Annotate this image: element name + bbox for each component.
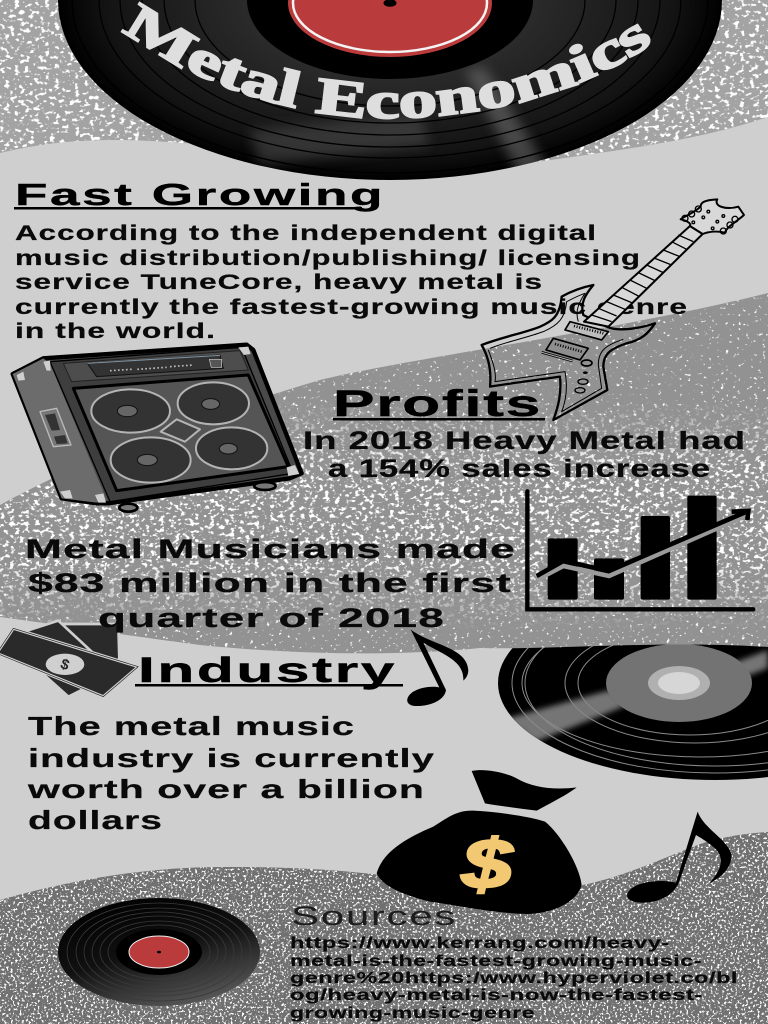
icon: banknotes	[0, 621, 138, 697]
text block: industry worth: dollars	[28, 805, 163, 835]
text block: source links: growing-music-genre	[290, 1005, 535, 1022]
text block: source links	[290, 935, 738, 1022]
vinyl record: sources	[58, 898, 260, 1006]
record label	[129, 936, 189, 968]
text block: fast growing: service TuneCore, heavy metal is	[15, 271, 543, 294]
text block: musicians earnings: Metal Musicians made	[25, 534, 516, 564]
vinyl record: right	[498, 644, 768, 780]
text block: musicians earnings: quarter of 2018	[98, 603, 445, 633]
text block: industry worth	[26, 711, 435, 835]
dollar sign: $	[461, 826, 513, 904]
text block: sales increase: a 154% sales increase	[328, 455, 711, 483]
amp wheels	[119, 482, 276, 512]
texture band: top	[0, 0, 768, 162]
text block: industry worth: worth over a billion	[26, 774, 425, 804]
trend arrow	[537, 511, 748, 580]
text block: industry worth: The metal music	[28, 711, 355, 741]
heading: Profits: Profits	[333, 383, 542, 424]
amp speakers	[91, 382, 267, 483]
record label	[606, 644, 752, 722]
text block: fast growing: music distribution/publishing/ licensing	[15, 247, 641, 270]
text block: fast growing: in the world.	[15, 320, 216, 343]
guitar pickups and knobs	[542, 322, 608, 393]
text block: source links: og/heavy-metal-is-now-the-fastest-	[290, 987, 703, 1004]
chart axes	[527, 491, 753, 609]
icon: banknotes: $	[58, 656, 71, 674]
texture band: middle	[0, 280, 768, 660]
text block: sales increase: In 2018 Heavy Metal had	[303, 427, 746, 455]
heading: Industry: Industry	[138, 651, 397, 690]
amp corners	[17, 347, 299, 503]
text block: fast growing: According to the independent digital	[15, 222, 597, 245]
text block: sales increase	[303, 427, 746, 483]
heading: Sources: Sources	[291, 901, 457, 931]
chart bars	[548, 496, 717, 600]
text block: musicians earnings: $83 million in the first	[28, 568, 512, 598]
icon: guitar amplifier	[13, 345, 302, 512]
guitar neck	[584, 226, 703, 327]
text block: source links: metal-is-the-fastest-growing-music-	[290, 953, 702, 970]
icon: money bag	[377, 770, 582, 914]
text block: industry worth: industry is currently	[28, 743, 435, 773]
text block: musicians earnings	[25, 534, 516, 633]
guitar head	[681, 199, 744, 234]
text block: source links: genre%20https:/www.hyperviolet.co/bl	[290, 970, 738, 987]
vinyl record: header	[58, 0, 722, 180]
amp grille	[73, 375, 288, 491]
text block: source links: https://www.kerrang.com/heavy-	[290, 935, 670, 952]
amp handle	[40, 408, 71, 447]
icon: electric guitar	[482, 199, 744, 420]
amp controls	[63, 351, 248, 382]
icon: music note upper	[407, 629, 468, 706]
icon: music note lower	[627, 812, 732, 903]
text block: fast growing	[15, 222, 688, 343]
heading: Fast Growing: Fast Growing	[15, 177, 385, 212]
bar chart icon	[527, 491, 753, 609]
record label	[288, 0, 492, 57]
text block: fast growing: currently the fastest-growing music genre	[15, 296, 688, 319]
texture band: bottom	[0, 820, 768, 1024]
